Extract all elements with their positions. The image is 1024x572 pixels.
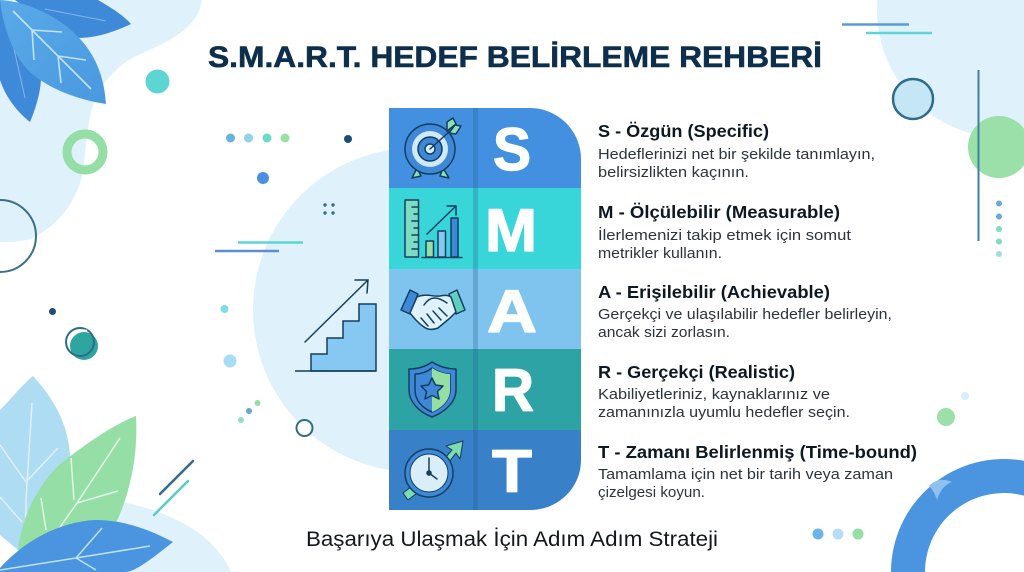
icon: target with arrow xyxy=(405,118,461,178)
text block: M: İlerlemenizi takip etmek için somut xyxy=(598,226,852,244)
icon: clock with rising arrow xyxy=(403,441,463,500)
footer tagline: Başarıya Ulaşmak İçin Adım Adım Strateji xyxy=(306,528,718,551)
icon: stairs with rising arrow xyxy=(295,280,376,371)
text block: T: Tamamlama için net bir tarih veya zaman xyxy=(598,466,893,483)
icon: handshake xyxy=(401,290,465,329)
background blob: top left xyxy=(0,0,202,242)
text block: M xyxy=(598,202,852,262)
text block: S: belirsizlikten kaçının. xyxy=(598,164,749,181)
panel: SMART acronym column xyxy=(389,108,581,510)
text block: A: Gerçekçi ve ulaşılabilir hedefler belirleyin, xyxy=(598,306,892,323)
letter A: A xyxy=(487,278,537,345)
row T xyxy=(389,430,581,510)
text block: M: metrikler kullanın. xyxy=(598,245,722,262)
background circle: top right xyxy=(877,0,1024,138)
letter T: T xyxy=(492,438,532,505)
decorative shapes: left xyxy=(0,70,352,515)
icon: ruler and bar chart xyxy=(405,200,462,258)
title: S.M.A.R.T. HEDEF BELİRLEME REHBERİ xyxy=(208,41,822,74)
text block: S: Hedeflerinizi net bir şekilde tanımlayın, xyxy=(598,146,875,163)
letter R: R xyxy=(492,357,534,424)
text block: R: zamanınızla uyumlu hedefler seçin. xyxy=(598,404,850,421)
letter M: M xyxy=(485,197,537,264)
letter S: S xyxy=(493,116,531,183)
leaves: top left xyxy=(0,0,131,122)
background circle: centre xyxy=(253,148,577,472)
leaves: bottom left xyxy=(0,376,173,572)
text block: T: çizelgesi koyun. xyxy=(598,484,705,501)
text block: R xyxy=(598,362,850,421)
text block: R: R - Gerçekçi (Realistic) xyxy=(598,362,795,382)
text block: S xyxy=(598,121,875,181)
text block: A xyxy=(598,282,892,341)
ring: bottom right xyxy=(891,459,1024,572)
row A xyxy=(389,269,581,349)
background blob: bottom left xyxy=(60,500,231,572)
text block: M: M - Ölçülebilir (Measurable) xyxy=(598,202,840,222)
row R xyxy=(389,349,581,430)
text block: T xyxy=(598,442,917,501)
text block: A: ancak sizi zorlasın. xyxy=(598,324,730,341)
text block: S: S - Özgün (Specific) xyxy=(598,121,769,141)
row M xyxy=(389,188,581,269)
row S xyxy=(389,108,581,188)
text block: R: Kabiliyetleriniz, kaynaklarınız ve xyxy=(598,386,830,403)
decorative shapes: right xyxy=(812,24,1024,540)
icon: shield with star xyxy=(409,362,456,417)
text block: T: T - Zamanı Belirlenmiş (Time-bound) xyxy=(598,442,917,462)
text block: A: A - Erişilebilir (Achievable) xyxy=(598,282,830,302)
